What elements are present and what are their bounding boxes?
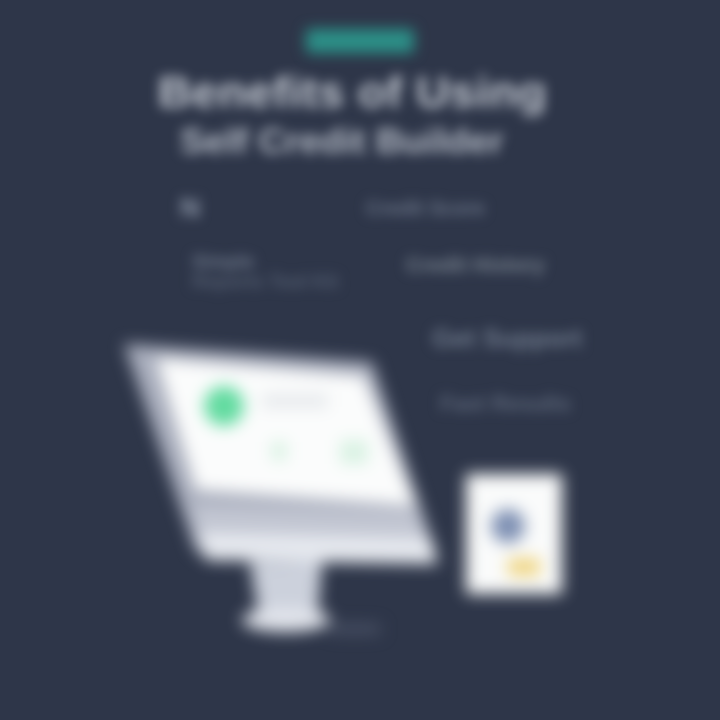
feature labels bbox=[175, 192, 585, 416]
label: left: Reports Tool Kit bbox=[192, 272, 338, 293]
monitor chin bbox=[192, 505, 438, 564]
base shadow bbox=[330, 624, 380, 634]
label: middle right: Credit History bbox=[406, 254, 545, 277]
monitor outer frame bbox=[124, 344, 436, 552]
label: lower right: Fast Results bbox=[440, 391, 571, 416]
screen: green chart bits bbox=[272, 442, 286, 460]
label: top right: Credit Score bbox=[366, 198, 485, 220]
label: left: Simple bbox=[192, 252, 254, 273]
label: left bbox=[190, 252, 338, 293]
title bbox=[152, 68, 552, 161]
stand bbox=[250, 562, 322, 612]
badge bbox=[306, 29, 414, 53]
chin highlight bbox=[198, 532, 438, 564]
document card bbox=[466, 474, 562, 594]
screen: grey block bbox=[262, 394, 328, 408]
label: icon mark: N bbox=[180, 192, 200, 223]
stand base bbox=[242, 608, 330, 632]
title: Benefits of Using bbox=[158, 68, 547, 117]
screen: green circle bbox=[204, 386, 244, 426]
label: far right: Get Support bbox=[432, 323, 582, 353]
title: Self Credit Builder bbox=[180, 122, 504, 161]
monitor screen bbox=[156, 358, 416, 506]
document: yellow accent bbox=[508, 558, 540, 576]
document: blue circle bbox=[491, 509, 525, 543]
